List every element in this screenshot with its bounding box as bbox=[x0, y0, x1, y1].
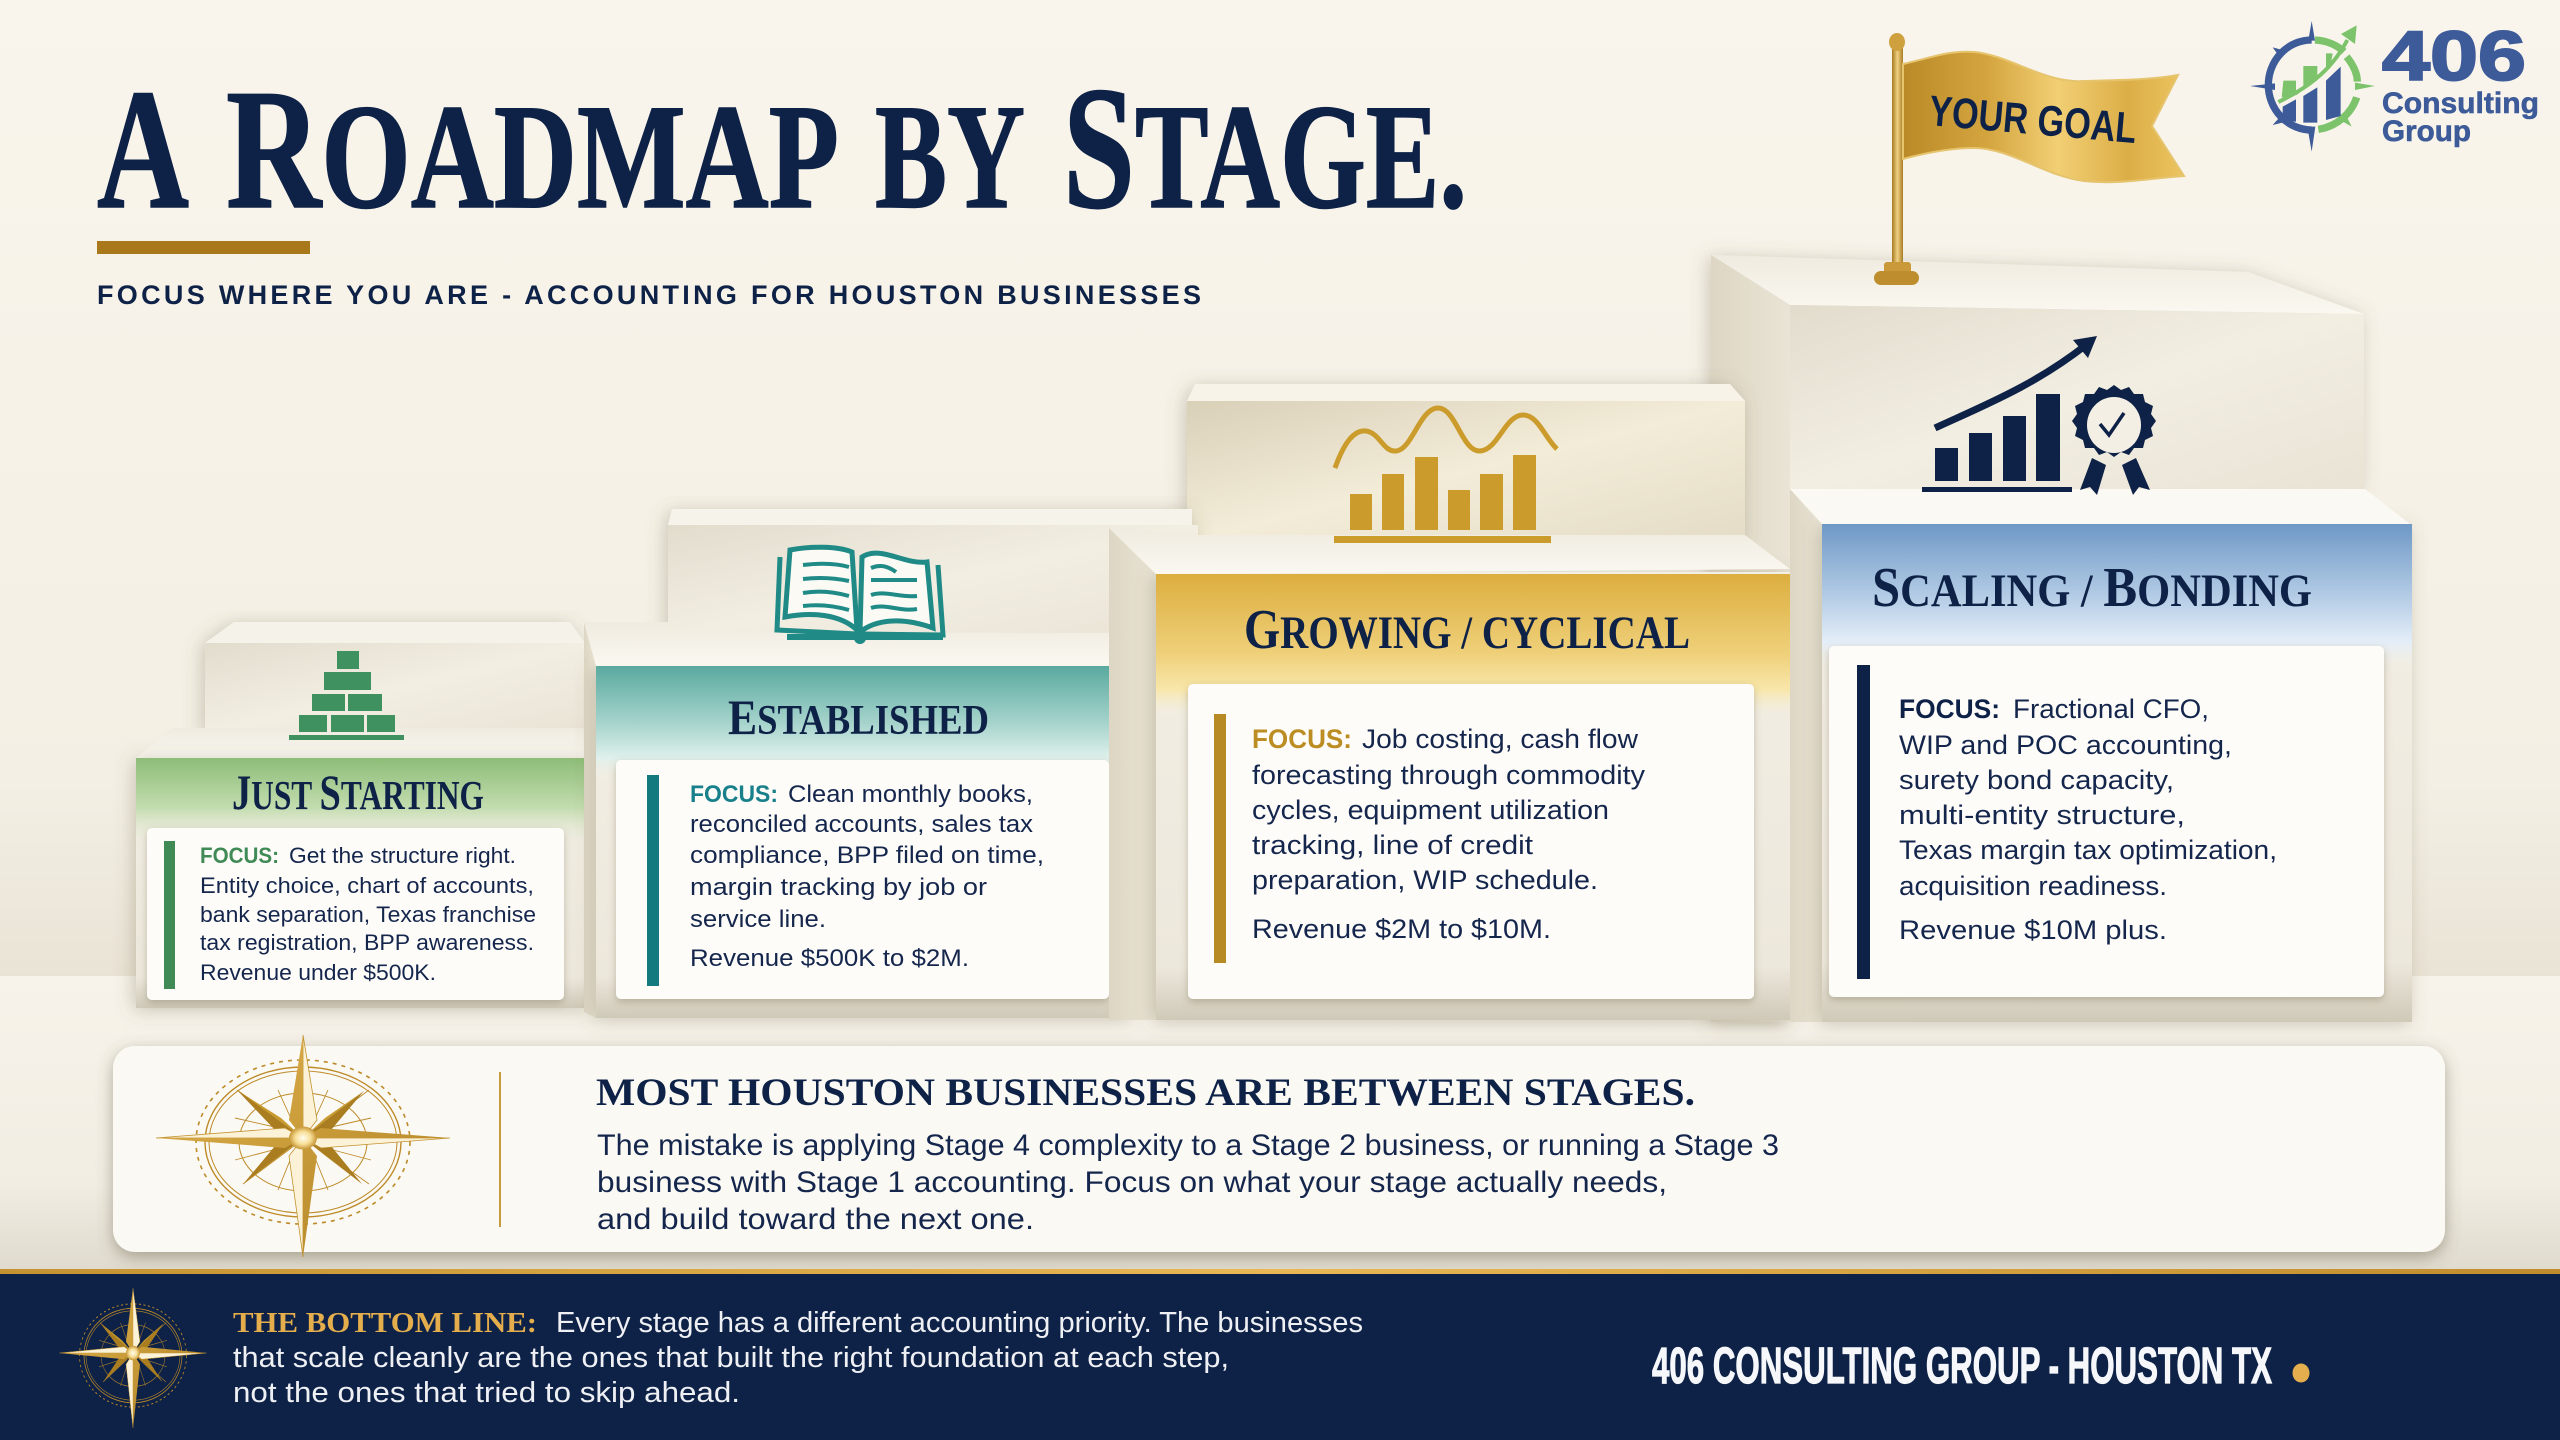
card: scaling / bonding bbox=[1829, 646, 2384, 997]
icon: small compass bbox=[60, 1288, 206, 1428]
divider bbox=[499, 1072, 501, 1227]
card: established bbox=[616, 760, 1109, 999]
flag label: YOUR GOAL bbox=[1927, 87, 2139, 153]
card text: growing / cyclical: cycles, equipment utilization bbox=[1252, 795, 1609, 825]
step 4 upper block bbox=[1711, 255, 2364, 1022]
panel: established bbox=[584, 547, 1134, 1018]
card text: scaling / bonding: FOCUS: bbox=[1899, 694, 2000, 724]
step 2 upper block bbox=[668, 509, 1198, 637]
card text: just starting: Get the structure right. bbox=[289, 843, 516, 868]
card text: scaling / bonding: Fractional CFO, bbox=[2013, 694, 2209, 724]
card text: established: service line. bbox=[690, 906, 826, 933]
card text: just starting bbox=[200, 843, 536, 985]
title: STAGE. bbox=[1063, 51, 1467, 246]
icon: gold compass bbox=[156, 1035, 450, 1257]
card text: established: reconciled accounts, sales tax bbox=[690, 811, 1033, 838]
card accent bar bbox=[164, 841, 175, 989]
card text: growing / cyclical: Revenue $2M to $10M. bbox=[1252, 914, 1551, 944]
flag: your goal bbox=[1874, 33, 2184, 285]
title: A bbox=[97, 55, 189, 245]
card text: just starting: bank separation, Texas franchise bbox=[200, 902, 536, 927]
icon: growth chart and badge bbox=[1922, 336, 2156, 495]
gold rule bbox=[0, 1269, 2560, 1274]
callout text: and build toward the next one. bbox=[597, 1203, 1034, 1236]
card text: growing / cyclical: tracking, line of credit bbox=[1252, 830, 1534, 860]
step 3 upper block bbox=[1187, 384, 1745, 540]
card text: scaling / bonding bbox=[1899, 694, 2277, 945]
card text: scaling / bonding: WIP and POC accounting, bbox=[1899, 730, 2232, 760]
card text: scaling / bonding: surety bond capacity, bbox=[1899, 765, 2174, 795]
card text: scaling / bonding: Revenue $10M plus. bbox=[1899, 915, 2167, 945]
icon: cyclical bar chart bbox=[1334, 408, 1557, 543]
card text: established: margin tracking by job or bbox=[690, 874, 987, 901]
card text: growing / cyclical: Job costing, cash flow bbox=[1362, 724, 1639, 754]
bottom band bbox=[0, 1269, 2560, 1440]
bottom line text: not the ones that tried to skip ahead. bbox=[233, 1377, 740, 1409]
subtitle: FOCUS WHERE YOU ARE - ACCOUNTING FOR HOUSTON BUSINESSES bbox=[97, 280, 1201, 310]
step 1 upper block bbox=[205, 622, 585, 733]
title: BY bbox=[875, 74, 1025, 240]
title: ROADMAP bbox=[226, 55, 839, 245]
card text: growing / cyclical bbox=[1252, 724, 1646, 944]
bottom line text bbox=[233, 1307, 1363, 1409]
footer dot bbox=[2292, 1364, 2310, 1382]
card text: growing / cyclical: preparation, WIP schedule. bbox=[1252, 865, 1598, 895]
card text: just starting: FOCUS: bbox=[200, 843, 279, 868]
card accent bar bbox=[1214, 714, 1226, 963]
card text: established: Revenue $500K to $2M. bbox=[690, 945, 969, 972]
callout heading: MOST HOUSTON BUSINESSES ARE BETWEEN STAGES. bbox=[596, 1071, 1695, 1114]
icon: stacked blocks bbox=[289, 651, 404, 740]
background wall bbox=[0, 0, 2560, 980]
card: just starting bbox=[147, 828, 564, 1000]
logo: 406 consulting group bbox=[2250, 17, 2539, 152]
card text: just starting: Revenue under $500K. bbox=[200, 960, 436, 985]
heading: just starting: JUST STARTING bbox=[232, 764, 484, 820]
card: growing / cyclical bbox=[1188, 684, 1754, 999]
card text: scaling / bonding: Texas margin tax optimization, bbox=[1899, 835, 2277, 865]
panel: scaling / bonding bbox=[1790, 336, 2412, 1022]
icon: open book bbox=[777, 547, 943, 644]
card text: growing / cyclical: forecasting through commodity bbox=[1252, 760, 1646, 790]
callout text: business with Stage 1 accounting. Focus on what your stage actually needs, bbox=[597, 1166, 1667, 1199]
panel: just starting bbox=[136, 651, 590, 1008]
card text: just starting: tax registration, BPP awareness. bbox=[200, 930, 534, 955]
panel: most houston businesses bbox=[113, 1035, 2445, 1257]
title bbox=[97, 51, 1467, 246]
title underline bbox=[97, 241, 310, 254]
card text: scaling / bonding: acquisition readiness. bbox=[1899, 871, 2167, 901]
card accent bar bbox=[1857, 665, 1870, 979]
card text: just starting: Entity choice, chart of accounts, bbox=[200, 873, 534, 898]
card text: scaling / bonding: multi-entity structure, bbox=[1899, 800, 2185, 830]
callout text: The mistake is applying Stage 4 complexity to a Stage 2 business, or running a Stage 3 bbox=[597, 1129, 1779, 1162]
callout text bbox=[597, 1129, 1779, 1236]
bottom line text: THE BOTTOM LINE: bbox=[233, 1307, 537, 1339]
bottom line text: that scale cleanly are the ones that built the right foundation at each step, bbox=[233, 1342, 1229, 1374]
logo: 406 consulting group: Consulting bbox=[2382, 87, 2539, 120]
card text: growing / cyclical: FOCUS: bbox=[1252, 724, 1352, 754]
heading: growing / cyclical: GROWING / CYCLICAL bbox=[1244, 599, 1690, 661]
logo: 406 consulting group: Group bbox=[2382, 115, 2471, 148]
heading: established: ESTABLISHED bbox=[728, 689, 989, 745]
heading: scaling / bonding: SCALING / BONDING bbox=[1872, 557, 2312, 619]
logo icon bbox=[2250, 21, 2375, 152]
bottom line text: Every stage has a different accounting priority. The businesses bbox=[556, 1307, 1363, 1339]
card text: established bbox=[690, 781, 1044, 972]
floor shelf bbox=[0, 976, 2560, 1272]
panel: growing / cyclical bbox=[1109, 408, 1790, 1020]
logo text: 406 bbox=[2382, 17, 2526, 95]
card text: established: FOCUS: bbox=[690, 781, 778, 808]
card text: established: Clean monthly books, bbox=[788, 781, 1033, 808]
card accent bar bbox=[647, 775, 659, 986]
card text: established: compliance, BPP filed on time, bbox=[690, 842, 1044, 869]
